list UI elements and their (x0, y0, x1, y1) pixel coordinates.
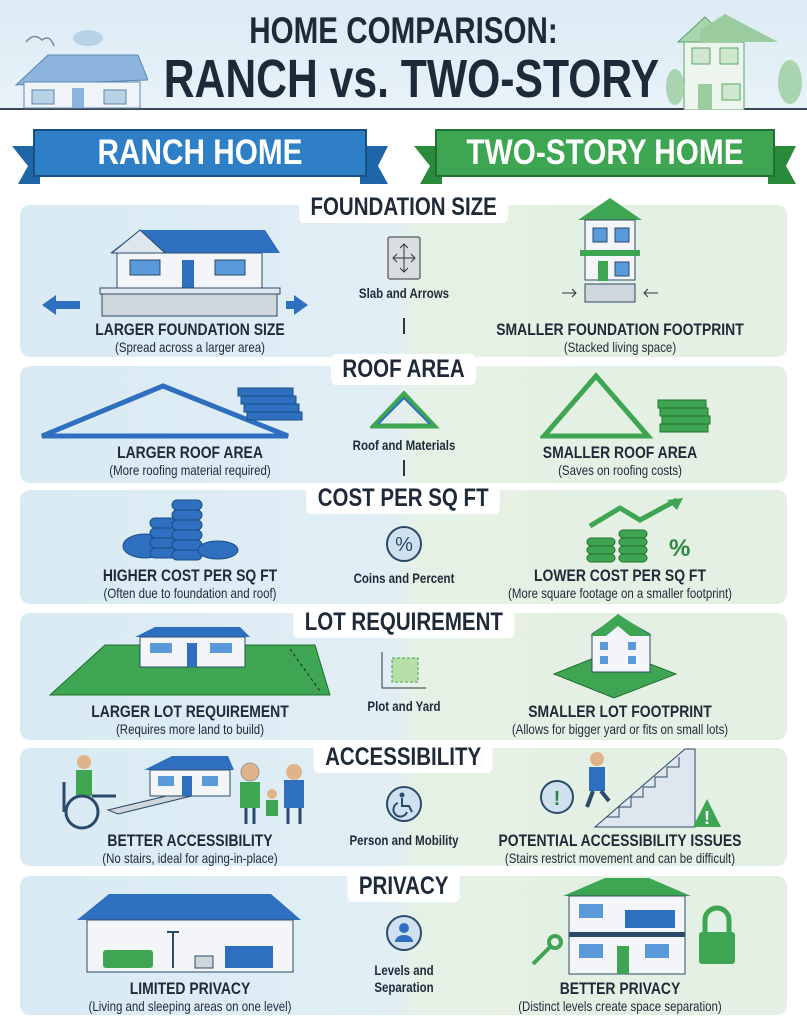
label: limited privacy: (Living and sleeping areas on one level) (89, 998, 291, 1014)
icon: percent circle (386, 526, 422, 562)
icon: large lot with ranch (48, 627, 331, 696)
banner: ranch home: RANCH HOME (98, 133, 302, 172)
header background (0, 0, 807, 110)
label: levels and separation: Levels and (374, 962, 434, 978)
icon: two-story cross-section with key and lock (532, 878, 735, 974)
label: plot and yard: Plot and Yard (367, 698, 441, 714)
label: coins and percent: Coins and Percent (354, 570, 454, 586)
label: smaller roof area: (Saves on roofing costs) (558, 462, 682, 478)
label: potential accessibility issues (499, 831, 741, 866)
label: better accessibility: (No stairs, ideal for aging-in-place) (102, 850, 278, 866)
icon: ranch house header (14, 30, 148, 108)
icon: large roof and shingles (41, 383, 302, 438)
title (164, 10, 659, 109)
label: better privacy: (Distinct levels create space separation) (518, 998, 722, 1014)
label: slab and arrows: Slab and Arrows (359, 285, 449, 301)
label: larger lot (91, 702, 289, 737)
label: better privacy: BETTER PRIVACY (560, 979, 680, 998)
label: smaller roof area: SMALLER ROOF AREA (543, 443, 697, 462)
icon: person and mobility (386, 786, 422, 822)
label: smaller foundation footprint: (Stacked living space) (564, 339, 676, 355)
banner: two-story home (414, 129, 796, 184)
panel: roof area (20, 366, 787, 483)
label: lower cost (508, 566, 732, 601)
label: larger roof area: LARGER ROOF AREA (117, 443, 263, 462)
heading: cost per sq ft: COST PER SQ FT (318, 484, 489, 512)
icon: small roof and shingles (540, 372, 710, 438)
label: better privacy (472, 979, 768, 1014)
panel: privacy (20, 876, 787, 1015)
icon: ranch house on slab (42, 230, 308, 316)
icon: coins with arrow (586, 498, 690, 562)
icon: stairs and warnings (540, 748, 721, 828)
icon: stairs and warnings: ! (554, 788, 560, 810)
label: higher cost (103, 566, 277, 601)
label: higher cost: HIGHER COST PER SQ FT (103, 566, 277, 585)
label: larger foundation size (95, 320, 285, 355)
label: larger foundation size: (Spread across a larger area) (115, 339, 265, 355)
label: smaller lot: SMALLER LOT FOOTPRINT (528, 702, 712, 721)
label: roof and materials: Roof and Materials (353, 437, 455, 453)
banner: ranch home (12, 129, 388, 184)
icon: two-story house header (666, 14, 802, 110)
icon: percent circle: % (395, 534, 413, 556)
label: smaller roof area (543, 443, 697, 478)
label: smaller foundation footprint (496, 320, 744, 355)
banner: two-story home: TWO-STORY HOME (466, 133, 744, 172)
label: potential accessibility issues: (Stairs restrict movement and can be difficult) (505, 850, 735, 866)
label: limited privacy: LIMITED PRIVACY (130, 979, 250, 998)
label: smaller lot: (Allows for bigger yard or fits on small lots) (512, 721, 728, 737)
panel: accessibility (20, 748, 787, 866)
heading: lot requirement: LOT REQUIREMENT (304, 608, 503, 636)
heading: foundation size: FOUNDATION SIZE (310, 193, 497, 221)
label: lower cost: LOWER COST PER SQ FT (534, 566, 706, 585)
label: smaller foundation footprint: SMALLER FOUNDATION FOOTPRINT (496, 320, 744, 339)
icon: slab and arrows (388, 236, 420, 280)
heading: accessibility: ACCESSIBILITY (325, 743, 482, 771)
label: larger lot: LARGER LOT REQUIREMENT (91, 702, 289, 721)
label: limited privacy (42, 979, 338, 1014)
label: smaller lot (512, 702, 728, 737)
label: higher cost: (Often due to foundation and roof) (104, 585, 276, 601)
icon: stairs and warnings: ! (704, 808, 710, 828)
label: better accessibility: BETTER ACCESSIBILITY (107, 831, 273, 850)
icon: two-story house (562, 198, 658, 302)
icon: coins with arrow: % (669, 535, 690, 562)
icon: small lot two-story (552, 614, 678, 698)
title: HOME COMPARISON: (249, 10, 558, 51)
label: lower cost: (More square footage on a smaller footprint) (508, 585, 732, 601)
icon: plot and yard (382, 652, 426, 688)
label: larger roof area: (More roofing material required) (109, 462, 271, 478)
heading: roof area: ROOF AREA (342, 355, 465, 383)
icon: levels and separation (386, 915, 422, 951)
panel: cost per sq ft (20, 490, 787, 604)
label: larger roof area (109, 443, 271, 478)
label: levels and separation (374, 962, 434, 995)
label: larger foundation size: LARGER FOUNDATION SIZE (95, 320, 285, 339)
icon: wheelchair ramp and family (62, 755, 304, 830)
panel: foundation size (20, 205, 787, 357)
label: better accessibility (102, 831, 278, 866)
label: person and mobility: Person and Mobility (349, 832, 459, 848)
panel: lot requirement (20, 613, 787, 740)
heading: privacy: PRIVACY (359, 872, 448, 900)
label: larger lot: (Requires more land to build) (116, 721, 264, 737)
icon: roof and materials (370, 390, 440, 428)
icon: ranch cross-section (77, 894, 301, 972)
label: potential accessibility issues: POTENTIAL ACCESSIBILITY ISSUES (499, 831, 741, 850)
title: RANCH vs. TWO-STORY (164, 49, 659, 109)
icon: coin stacks (122, 500, 238, 560)
label: levels and separation: Separation (374, 979, 434, 995)
